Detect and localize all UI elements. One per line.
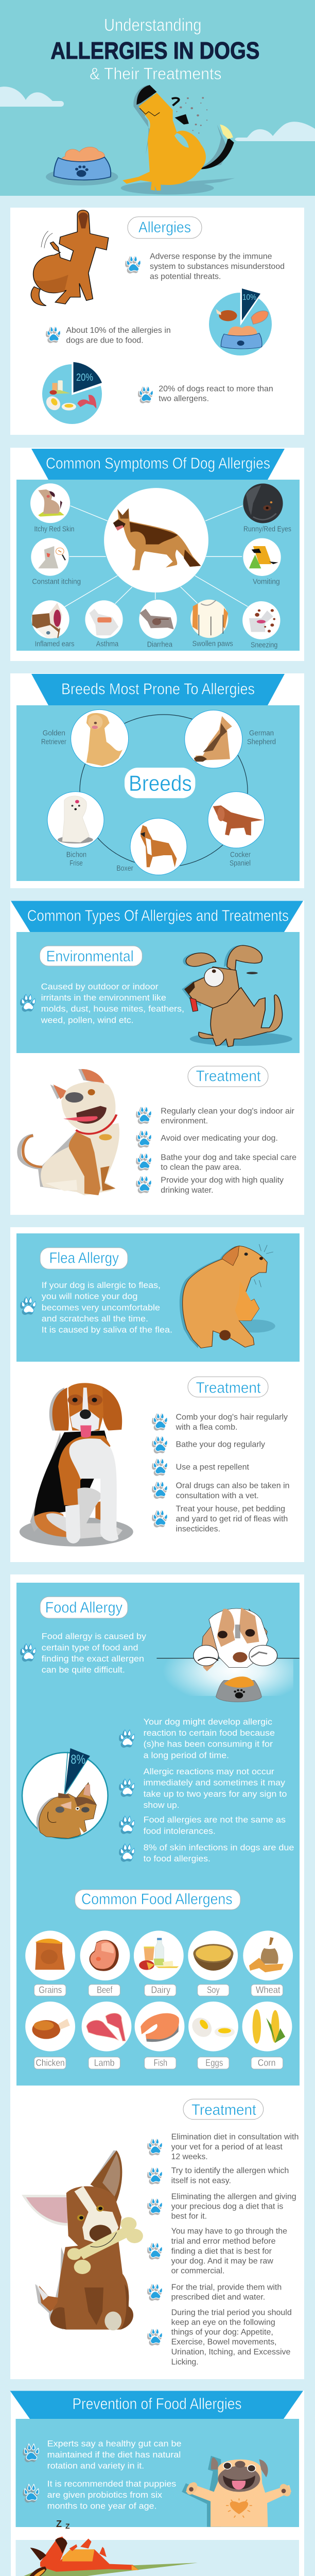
allergen labels: Soy: [207, 1985, 220, 1995]
icon: white paw: [118, 1844, 135, 1861]
text: food allergy facts: to food allergies.: [144, 1854, 211, 1863]
icon: paw: [151, 1481, 168, 1498]
allergen labels: Eggs: [205, 2058, 223, 2068]
icon: paw: [147, 2167, 163, 2184]
pill: environmental: Environmental: [46, 948, 134, 965]
text: food allergy treatment: your precious dog a diet that is: [171, 2202, 283, 2211]
allergen labels: Wheat: [256, 1985, 280, 1995]
text: food allergy: [42, 1632, 147, 1675]
allergen labels: Lamb: [94, 2058, 114, 2068]
text: food allergy treatment: [171, 2133, 299, 2366]
text: food allergy treatment: best for it.: [171, 2212, 207, 2221]
panel: breeds: [10, 673, 304, 888]
breed labels: German: [249, 729, 274, 738]
illustration: puppy at the table with bowl: [156, 1607, 300, 1702]
text: environmental treatment: Bathe your dog and take special care: [161, 1154, 296, 1162]
icon: paw: [147, 2242, 163, 2259]
chart: 8 percent pie with dog: [22, 1748, 108, 1839]
breed: golden retriever: [71, 709, 129, 768]
allergen: corn: [242, 2002, 292, 2052]
allergen labels: Beef: [97, 1985, 113, 1995]
icon: paw: [151, 1413, 168, 1430]
text: flea treatment: [176, 1413, 289, 1533]
chart: 8 percent pie with dog: 8%: [71, 1752, 85, 1767]
symptom: asthma: [85, 600, 123, 638]
allergen: eggs: [188, 2002, 238, 2052]
text: food allergy treatment: 12 weeks.: [171, 2153, 208, 2161]
text: environmental: molds, dust, house mites, feathers,: [41, 1004, 184, 1014]
text: food allergy facts: 8% of skin infections in dogs are due: [144, 1842, 294, 1852]
text: 20 percent: 20% of dogs react to more than: [159, 384, 273, 393]
symptom labels: Itchy Red Skin: [34, 525, 74, 534]
illustration: happy bulldog: [19, 1069, 119, 1195]
text: food allergy treatment: your dog. And it may be raw: [171, 2257, 273, 2266]
connector lines: [65, 506, 248, 607]
text: food allergy: Food allergy is caused by: [42, 1632, 147, 1641]
panel: environmental allergy: [10, 901, 304, 1215]
text: food allergy treatment: You may have to go through the: [171, 2227, 287, 2236]
icon: paw: [147, 2138, 163, 2155]
central dog circle: [104, 488, 208, 592]
text: environmental: Caused by outdoor or indoor: [41, 981, 159, 991]
center pill: breeds: Breeds: [129, 771, 192, 796]
breed labels: Cocker: [230, 850, 251, 859]
icon: white paw: [20, 994, 36, 1011]
text: food allergy: can be quite difficult.: [42, 1665, 125, 1675]
text: food allergy treatment: itself is not easy.: [171, 2176, 231, 2185]
text: environmental: irritants in the environment like: [41, 993, 166, 1003]
allergen labels: Fish: [154, 2058, 167, 2068]
icon: white paw: [118, 1779, 135, 1797]
text: 20 percent: two allergens.: [159, 395, 209, 403]
allergen labels: Grains: [39, 1985, 62, 1995]
text: prevention: maintained if the diet has natural: [47, 2450, 181, 2460]
symptom: runny red eyes: [243, 483, 283, 523]
icon: paw: [135, 1153, 152, 1170]
text: food allergy treatment: Urination, Itching, and Excessive: [171, 2348, 290, 2357]
chart: 10 percent pie: [209, 286, 272, 355]
illustration: dog with bone: [22, 2150, 143, 2330]
pill: food allergy: Food Allergy: [45, 1599, 122, 1616]
text: flea treatment: and yard to get rid of fleas with: [176, 1515, 288, 1523]
ribbon heading: prevention: [10, 2391, 303, 2419]
illustration: scratching dog: [121, 85, 235, 195]
icon: white paw: [118, 1730, 135, 1747]
text: environmental treatment: Provide your dog with high quality: [161, 1176, 284, 1185]
icon: paw: [137, 386, 154, 403]
blue background: flea: [16, 1233, 300, 1362]
symptom labels: Inflamed ears: [35, 639, 74, 648]
symptom: swollen paws: [190, 600, 228, 638]
text: food allergy treatment: or commercial.: [171, 2267, 224, 2276]
text: food allergy treatment: For the trial, provide them with: [171, 2283, 282, 2292]
pill: allergies: Allergies: [138, 219, 191, 236]
allergen labels: [34, 1985, 283, 2069]
text: 10 percent: dogs are due to food.: [66, 336, 144, 345]
chart: 20 percent pie: [42, 361, 103, 424]
breed: cocker spaniel: [208, 792, 265, 848]
text: food allergy treatment: things of your dog: Appetite,: [171, 2328, 273, 2337]
panel: common symptoms: [10, 448, 304, 661]
text: 20 percent: [159, 384, 273, 403]
symptom: constant itching: [31, 538, 69, 576]
text: prevention: [47, 2438, 181, 2511]
illustration: sleeping dog: Z: [56, 2519, 62, 2529]
icon: white paw: [118, 1816, 135, 1834]
icon: paw: [135, 1130, 152, 1147]
icon: white paw: [20, 1643, 37, 1661]
icon: paw: [147, 2198, 163, 2215]
blue background: food allergy: [16, 1583, 300, 2086]
cloud left: [0, 87, 64, 107]
symptom labels: [32, 525, 291, 650]
text: environmental: weed, pollen, wind etc.: [41, 1015, 134, 1025]
ribbon heading: common types: [11, 901, 303, 932]
text: flea treatment: insecticides.: [176, 1524, 220, 1533]
pill: common food allergens: Common Food Allergens: [81, 1891, 233, 1908]
chart: 20 percent pie: 20%: [76, 372, 93, 383]
text: food allergy treatment: Licking.: [171, 2358, 199, 2366]
text: flea allergy: [42, 1280, 172, 1335]
icon: paw: [151, 1435, 168, 1453]
allergen: grains: [25, 1930, 75, 1980]
panel: flea allergy: [10, 1227, 304, 1562]
symptom: vomiting: [243, 538, 281, 576]
icon: paw: [22, 2444, 40, 2462]
illustration: food bowl: [46, 147, 118, 185]
text: flea treatment: Comb your dog's hair regularly: [176, 1413, 288, 1422]
text: definition: system to substances misunderstood: [150, 262, 285, 271]
text: food allergy facts: show up.: [144, 1800, 180, 1810]
allergen: fish: [135, 2002, 184, 2052]
symptom labels: Constant itching: [32, 577, 81, 586]
text: flea allergy: If your dog is allergic to fleas,: [42, 1280, 161, 1290]
text: prevention: Experts say a healthy gut can be: [47, 2438, 181, 2448]
text: flea allergy: becomes very uncomfortable: [42, 1302, 160, 1312]
illustration: beagle: [20, 1383, 133, 1547]
header: [0, 0, 315, 196]
breed labels: Retriever: [41, 737, 66, 746]
text: flea treatment: consultation with a vet.: [176, 1492, 259, 1500]
symptom: sneezing: [242, 601, 280, 639]
text: flea treatment: Treat your house, pet bedding: [176, 1505, 285, 1514]
icon: paw: [135, 1106, 152, 1124]
icon: paw: [151, 1510, 168, 1527]
title: and their treatments: & Their Treatments: [90, 64, 221, 83]
symptom labels: Sneezing: [251, 641, 277, 650]
symptom labels: Vomiting: [253, 577, 280, 586]
text: food allergy treatment: Try to identify the allergen which: [171, 2166, 289, 2175]
breed labels: Frise: [69, 859, 83, 868]
text: food allergy treatment: keep an eye on the following: [171, 2318, 275, 2327]
pill: flea allergy: [40, 1248, 128, 1269]
text: 10 percent: About 10% of the allergies in: [66, 326, 171, 335]
panel: food allergy: [10, 1574, 304, 2379]
symptom labels: Runny/Red Eyes: [243, 525, 291, 534]
text: 10 percent: [66, 326, 171, 345]
symptom: inflamed ears: [31, 600, 69, 638]
text: food allergy treatment: Exercise, Bowel movements,: [171, 2338, 277, 2347]
text: environmental treatment: drinking water.: [161, 1186, 213, 1195]
breed labels: Spaniel: [230, 859, 251, 868]
pill: treatment: Treatment: [196, 1067, 261, 1084]
text: environmental treatment: Avoid over medicating your dog.: [161, 1134, 278, 1143]
icon: paw: [147, 2283, 163, 2300]
ribbon heading: symptoms: [31, 449, 285, 480]
text: food allergy treatment: prescribed diet and water.: [171, 2293, 265, 2302]
illustration: happy pug: [182, 2456, 293, 2527]
text: food allergy facts: Allergic reactions may not occur: [144, 1767, 274, 1776]
text: prevention: months to one year of age.: [47, 2501, 156, 2511]
icon: paw: [147, 2328, 163, 2345]
text: environmental treatment: Regularly clean your dog's indoor air: [161, 1107, 294, 1116]
breed: german shepherd: [185, 710, 242, 768]
blue background: prevention: [15, 2419, 299, 2527]
text: food allergy facts: (s)he has been consuming it for: [144, 1739, 273, 1749]
allergen labels: Chicken: [36, 2058, 65, 2068]
symptom labels: Swollen paws: [192, 639, 233, 648]
panel: allergies: [10, 208, 304, 435]
text: food allergy treatment: Eliminating the allergen and giving: [171, 2192, 296, 2201]
text: environmental treatment: [161, 1107, 296, 1195]
text: food allergy facts: take up to two years for any sign to: [144, 1789, 287, 1799]
text: flea treatment: with a flea comb.: [176, 1423, 237, 1432]
text: definition: Adverse response by the immune: [150, 252, 272, 261]
text: prevention: It is recommended that puppies: [47, 2479, 176, 2488]
blue background: environmental: [16, 932, 300, 1053]
text: food allergy treatment: finding a diet that is best for: [171, 2247, 272, 2256]
text: prevention: are given probiotics from six: [47, 2490, 163, 2500]
ribbon heading: breeds: [31, 674, 285, 705]
icon: paw: [22, 2484, 40, 2502]
blue background: breeds: [16, 705, 300, 881]
text: environmental: [41, 981, 184, 1025]
text: food allergy treatment: Elimination diet in consultation with: [171, 2133, 299, 2142]
allergen labels: Corn: [258, 2058, 276, 2068]
cloud right: [235, 122, 315, 141]
icon: paw: [125, 256, 142, 273]
text: environmental treatment: environment.: [161, 1117, 208, 1126]
text: food allergy treatment: your vet for a period of at least: [171, 2143, 283, 2151]
pill: flea allergy: Flea Allergy: [49, 1250, 119, 1267]
text: food allergy facts: a long period of time.: [144, 1750, 229, 1760]
panel: prevention: [10, 2391, 304, 2576]
icon: white paw: [20, 1297, 37, 1314]
breed labels: Golden: [43, 729, 65, 738]
breed labels: Boxer: [116, 864, 133, 873]
ribbon heading: breeds: Breeds Most Prone To Allergies: [61, 680, 255, 698]
chart: 10 percent pie: 10%: [242, 293, 256, 302]
illustration: sleeping dog: [15, 2519, 198, 2576]
illustration: sleeping dog: Z: [65, 2522, 70, 2530]
ribbon heading: symptoms: Common Symptoms Of Dog Allergies: [46, 454, 270, 472]
text: food allergy facts: food intolerances.: [144, 1826, 216, 1836]
breed labels: [41, 729, 276, 873]
text: food allergy: certain type of food and: [42, 1642, 138, 1652]
illustration: scratching tan dog: [182, 945, 292, 1047]
breed: boxer: [130, 818, 187, 875]
allergen: chicken: [25, 2002, 75, 2052]
illustration: scratching brown dog: [31, 210, 109, 306]
title: understanding: Understanding: [104, 15, 202, 35]
text: flea treatment: Oral drugs can also be taken in: [176, 1482, 289, 1490]
title: allergies in dogs: ALLERGIES IN DOGS: [50, 37, 259, 64]
pill: treatment: Treatment: [196, 1379, 261, 1396]
allergen: dairy: [134, 1930, 184, 1980]
text: flea allergy: you will notice your dog: [42, 1292, 137, 1301]
breed: bichon frise: [47, 792, 104, 848]
allergen labels: Dairy: [151, 1985, 170, 1995]
text: food allergy facts: Food allergies are not the same as: [144, 1815, 286, 1825]
text: food allergy facts: reaction to certain food because: [144, 1728, 275, 1738]
footer block: [15, 2519, 299, 2576]
icon: paw: [135, 1175, 152, 1193]
breed labels: Bichon: [66, 850, 86, 859]
icon: paw: [45, 326, 61, 343]
text: food allergy facts: immediately and sometimes it may: [144, 1778, 286, 1788]
pill: allergies: [128, 217, 202, 239]
text: flea treatment: Use a pest repellent: [176, 1463, 250, 1472]
text: flea allergy: and scratches all the time.: [42, 1314, 148, 1324]
text: prevention: rotation and variety in it.: [47, 2461, 144, 2471]
text: environmental treatment: to clean the paw area.: [161, 1163, 241, 1172]
symptom: diarrhea: [139, 600, 177, 639]
allergen: wheat: [243, 1930, 293, 1980]
allergen: beef: [80, 1930, 130, 1980]
text: food allergy facts: Your dog might develop allergic: [144, 1717, 273, 1726]
symptom labels: Asthma: [96, 639, 119, 648]
allergen: soy: [188, 1930, 238, 1980]
illustration: flea dog: [180, 1244, 275, 1348]
symptom labels: Diarrhea: [147, 640, 173, 649]
text: food allergy treatment: During the trial period you should: [171, 2308, 292, 2317]
breed labels: Shepherd: [247, 737, 276, 746]
text: flea allergy: It is caused by saliva of the flea.: [42, 1325, 172, 1335]
text: definition: as potential threats.: [150, 272, 221, 281]
ring connecting breeds: [80, 715, 248, 867]
text: flea treatment: Bathe your dog regularly: [176, 1440, 265, 1449]
text: food allergy facts: [144, 1717, 294, 1863]
symptom: itchy red skin: [30, 483, 70, 523]
ribbon heading: prevention: Prevention of Food Allergies: [72, 2395, 242, 2413]
pill: treatment: Treatment: [191, 2102, 256, 2119]
text: food allergy treatment: trial and error method before: [171, 2237, 276, 2246]
blue background: symptoms: [16, 480, 300, 651]
allergen: lamb: [82, 2002, 131, 2052]
text: food allergy: finding the exact allergen: [42, 1654, 144, 1664]
text: definition: [150, 252, 285, 281]
icon: paw: [151, 1458, 168, 1476]
